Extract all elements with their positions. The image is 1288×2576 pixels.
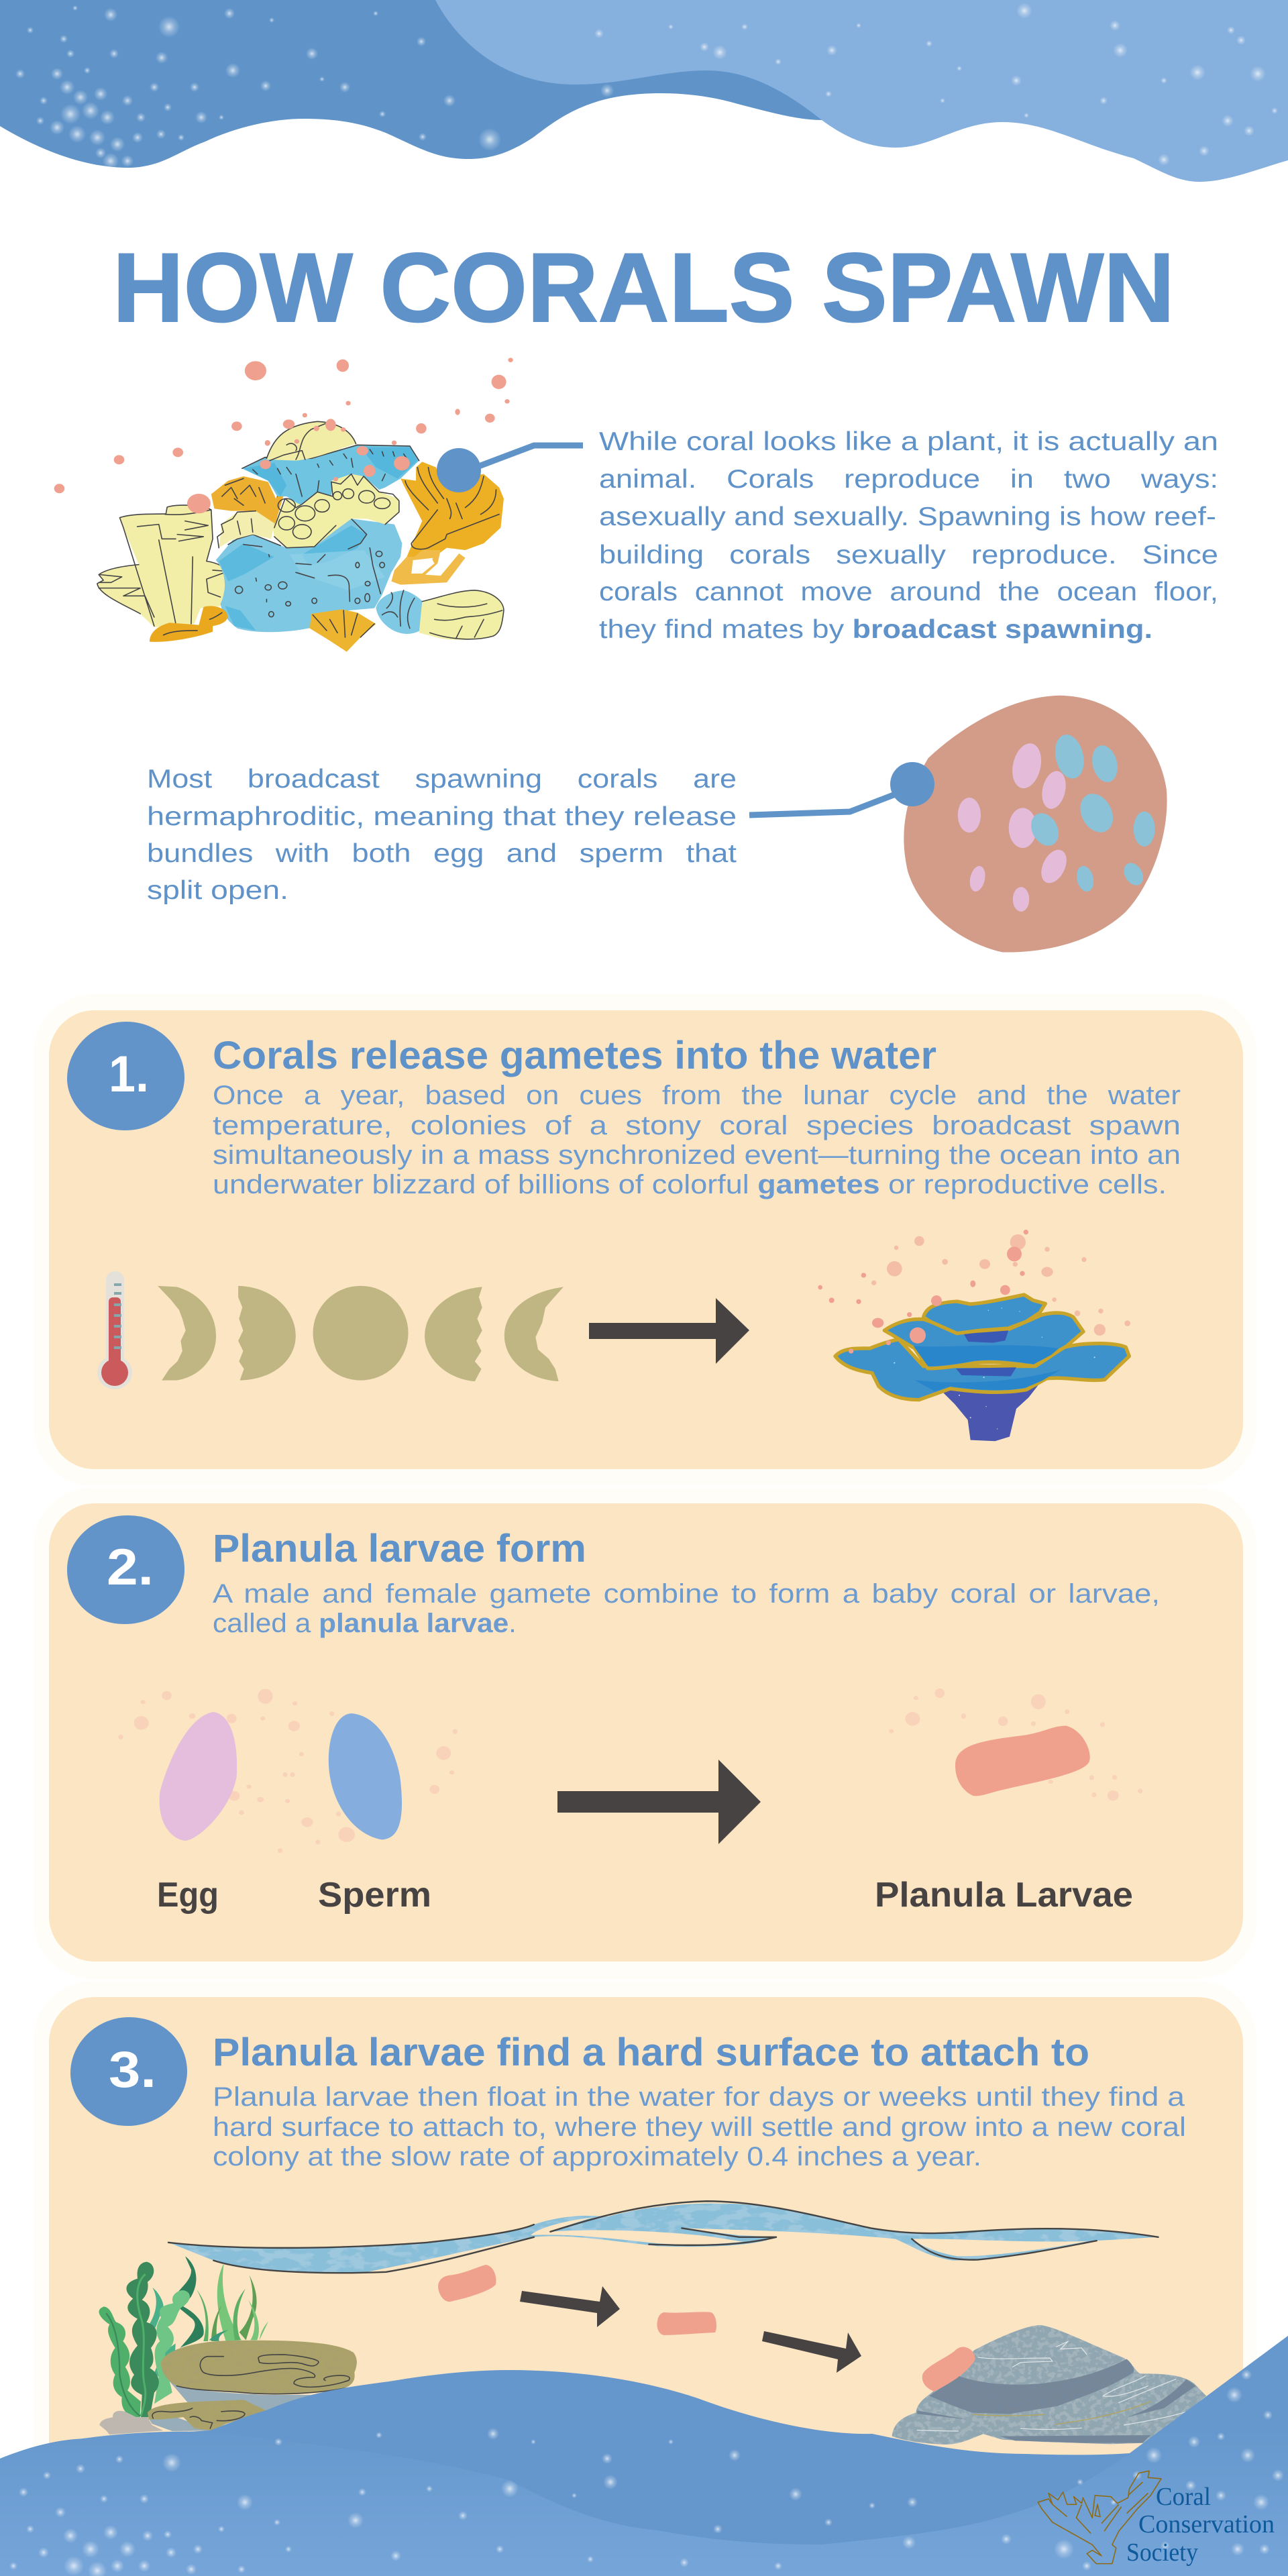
step 1 heading: Corals release gametes into the water <box>213 1034 936 1077</box>
icon: blue table coral <box>242 445 419 505</box>
intro text block: While coral looks like a plant, it is actually an <box>599 427 1218 456</box>
step 1 badge: 1. <box>109 1046 149 1103</box>
panel: step 2 <box>33 1487 1257 1979</box>
icon: water current ribbon <box>168 2201 1159 2273</box>
icon: grey stones <box>99 2411 163 2434</box>
step 1 body text: underwater blizzard of billions of colorful gametes or reproductive cells. <box>213 1170 1167 1199</box>
icon: orange base coral <box>150 606 227 642</box>
logo text: Society <box>1126 2538 1198 2567</box>
gamete diagram <box>118 1688 1142 1853</box>
callout pointer: coral <box>437 445 583 492</box>
callout pointer: bundle <box>749 762 934 815</box>
intro text block: corals cannot move around the ocean floor, <box>599 578 1218 606</box>
intro text block <box>599 427 1218 644</box>
step 1 body text: Once a year, based on cues from the lunar cycle and the water <box>213 1081 1181 1110</box>
icon: central yellow coral <box>273 474 399 548</box>
icon: yellow dome coral <box>266 421 356 461</box>
step 3 heading: Planula larvae find a hard surface to attach to <box>213 2031 1089 2074</box>
logo: Coral Conservation Society <box>1038 2471 1275 2567</box>
panel: step 1 <box>33 994 1257 1486</box>
step 1 body text: temperature, colonies of a stony coral species broadcast spawn <box>213 1111 1181 1140</box>
step 2 heading: Planula larvae form <box>213 1527 586 1570</box>
step 3 badge: 3. <box>109 2041 156 2098</box>
moon: waning crescent <box>504 1287 564 1381</box>
icon: seaweed <box>99 2256 268 2417</box>
icon: planula larva 2 <box>657 2312 716 2335</box>
icon: large olive rock <box>161 2341 357 2413</box>
icon: planula larva 3 <box>922 2347 975 2392</box>
second text block: Most broadcast spawning corals are <box>147 765 737 794</box>
icon: egg <box>160 1712 237 1841</box>
second text block: bundles with both egg and sperm that <box>147 839 737 868</box>
intro text block: building corals sexually reproduce. Since <box>599 541 1218 570</box>
icon: yellow clam coral <box>419 590 504 640</box>
icon: sperm <box>329 1713 402 1839</box>
second text block: hermaphroditic, meaning that they release <box>147 802 737 831</box>
step 2 body text <box>213 1579 1160 1638</box>
icon: orange branching coral right <box>391 462 504 585</box>
step 2 badge: 2. <box>107 1539 154 1596</box>
coral reef illustration <box>54 358 513 652</box>
second text block: split open. <box>147 876 288 905</box>
icon: thermometer <box>97 1271 132 1389</box>
icon: blue shell coral <box>376 590 435 634</box>
intro text block: they find mates by broadcast spawning. <box>599 615 1152 644</box>
moon: waxing crescent <box>158 1286 216 1381</box>
seaweed and rocks <box>99 2256 357 2434</box>
moon: first quarter <box>238 1286 296 1381</box>
icon: small orange fan coral <box>310 609 376 652</box>
step 2 badge <box>67 1515 184 1624</box>
intro text block: animal. Corals reproduce in two ways: <box>599 465 1218 494</box>
step 3 body text: Planula larvae then float in the water for days or weeks until they find a <box>213 2082 1185 2112</box>
intro text block: asexually and sexually. Spawning is how reef- <box>599 502 1216 531</box>
label: egg: Egg <box>157 1876 219 1915</box>
header waves <box>0 0 1288 182</box>
icon: grey rock with larva <box>892 2325 1206 2445</box>
step 3 body text: hard surface to attach to, where they will settle and grow into a new coral <box>213 2112 1186 2142</box>
step 3 body text <box>213 2082 1186 2171</box>
icon: left yellow coral <box>217 511 274 548</box>
label: planula larvae: Planula Larvae <box>875 1876 1133 1915</box>
icon: yellow tube coral <box>97 505 229 627</box>
panel: step 3 <box>33 1981 1257 2518</box>
icon: planula larva 1 <box>438 2265 496 2302</box>
step 1 body text <box>213 1081 1181 1199</box>
logo text: Conservation <box>1138 2510 1275 2538</box>
moon: full <box>313 1286 409 1381</box>
icon: logo coral outline <box>1038 2471 1161 2564</box>
icon: planula larva <box>955 1725 1090 1796</box>
arrow <box>589 1298 749 1364</box>
step 3 body text: colony at the slow rate of approximately 0.4 inches a year. <box>213 2142 981 2171</box>
icon: small olive rock <box>148 2400 266 2431</box>
step 2 body text: called a planula larvae . <box>213 1609 517 1638</box>
icon: blue boulder coral <box>216 519 402 632</box>
step 3 badge <box>70 2017 187 2126</box>
title: HOW CORALS SPAWN <box>113 233 1175 342</box>
spawning dots <box>54 358 513 513</box>
logo text: Coral <box>1156 2483 1211 2511</box>
second text block <box>147 765 737 905</box>
logo text <box>1126 2483 1275 2567</box>
arrow <box>762 2331 861 2373</box>
arrow <box>557 1760 761 1844</box>
step 1 body text: simultaneously in a mass synchronized event—turning the ocean into an <box>213 1140 1181 1170</box>
gamete bundle illustration <box>904 696 1167 952</box>
arrow <box>520 2286 620 2327</box>
icon: spawning table coral <box>818 1230 1130 1441</box>
moon phases <box>158 1286 564 1381</box>
icon: orange coral left <box>211 476 286 530</box>
step 2 body text: A male and female gamete combine to form a baby coral or larvae, <box>213 1579 1160 1609</box>
footer waves <box>0 2336 1288 2576</box>
label: sperm: Sperm <box>318 1876 431 1915</box>
step 1 badge <box>67 1022 184 1130</box>
moon: last quarter <box>425 1287 482 1381</box>
pale dots <box>118 1688 1142 1853</box>
